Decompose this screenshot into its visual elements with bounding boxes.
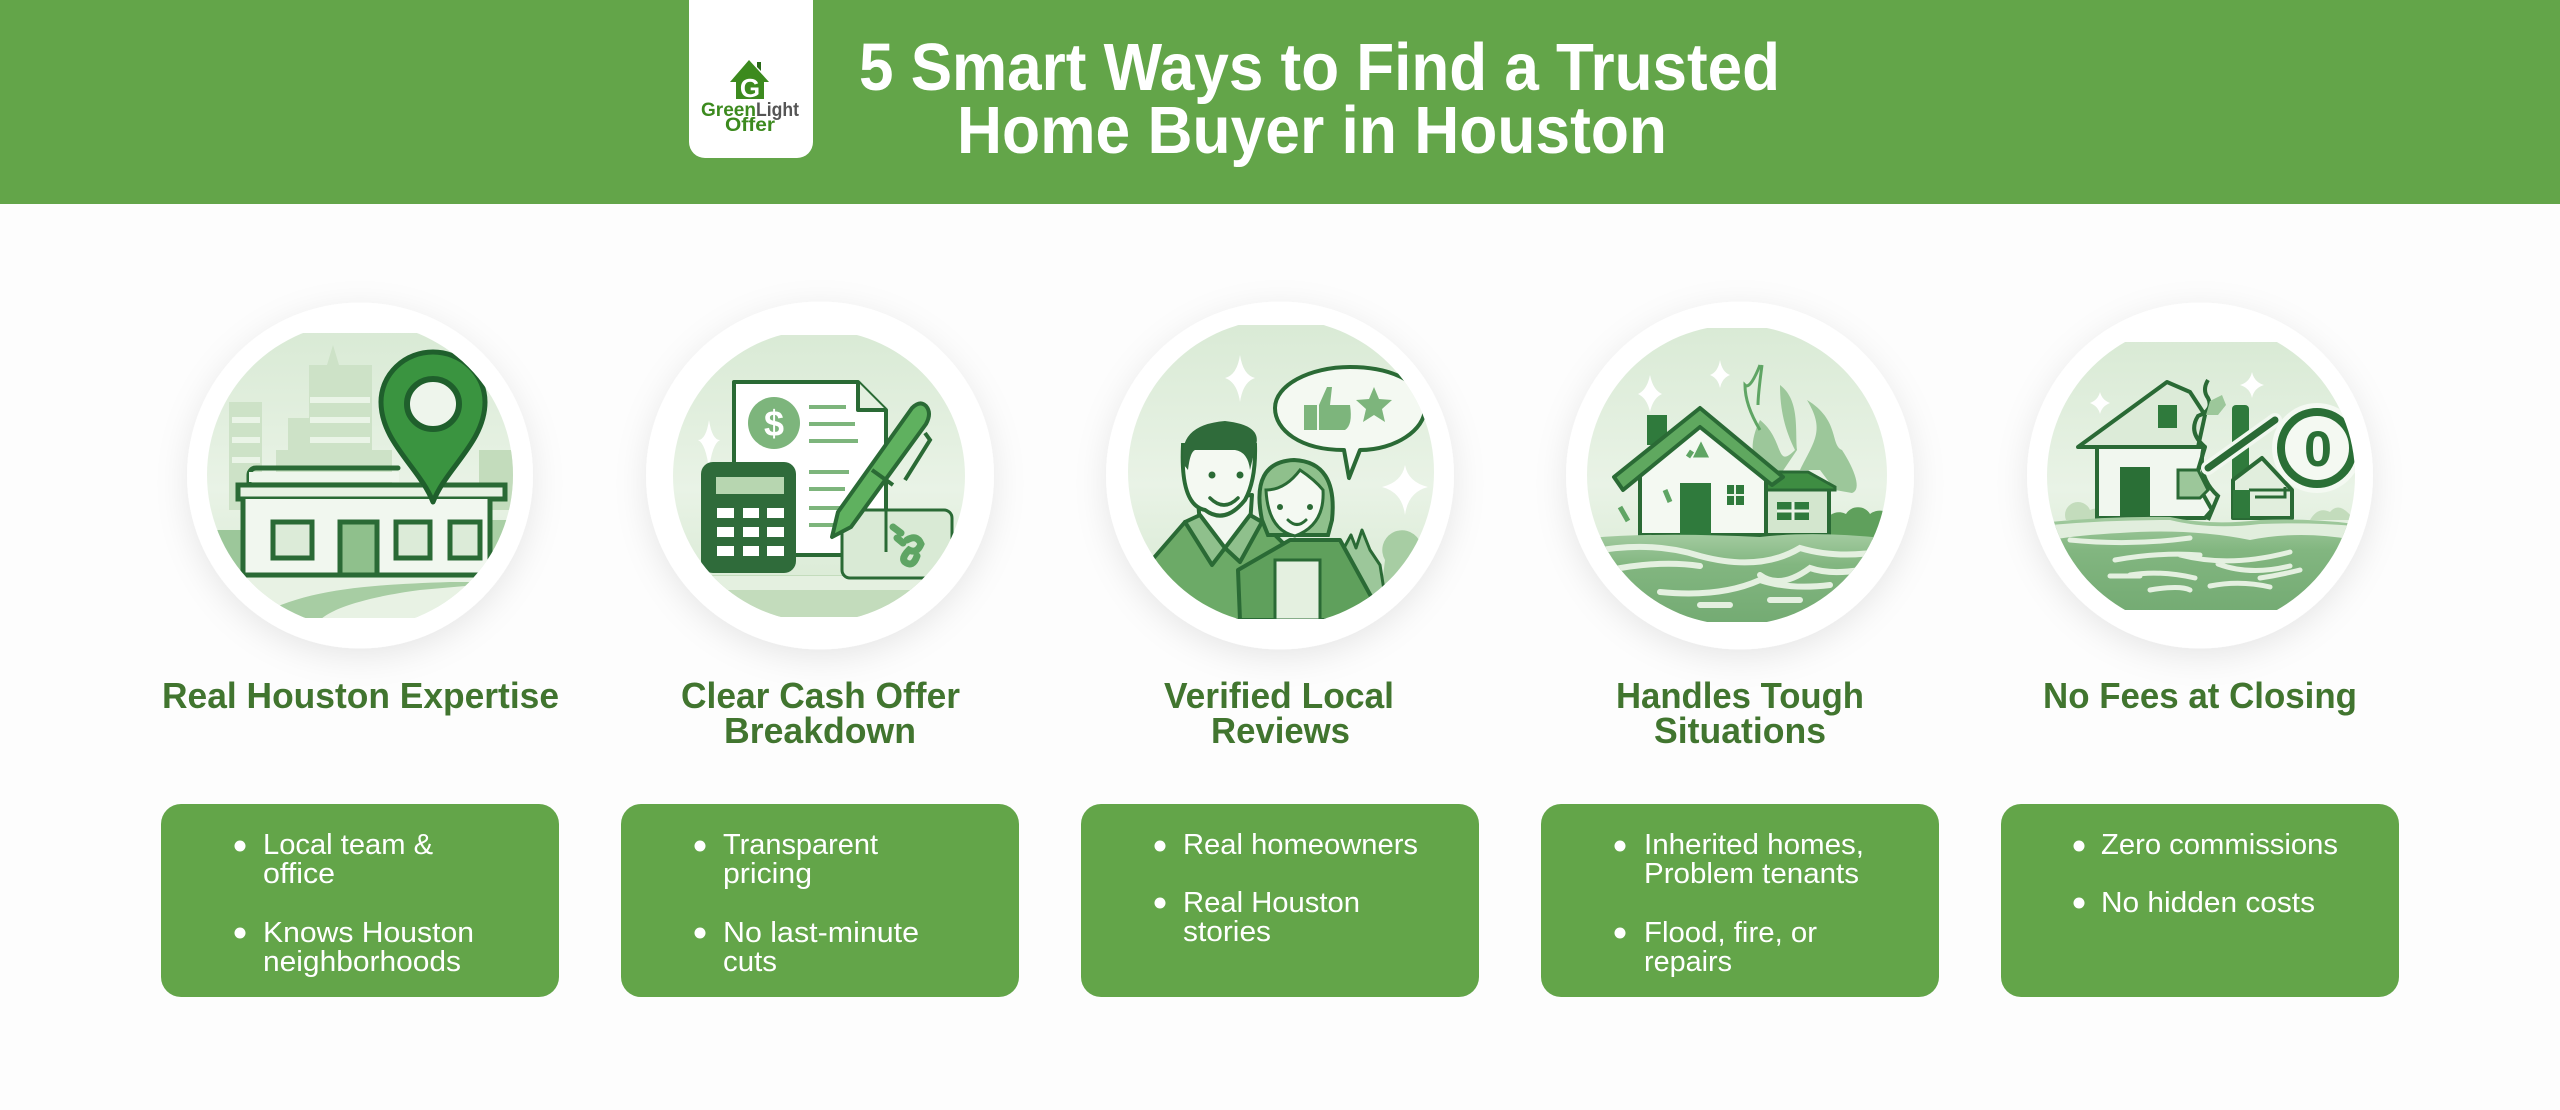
heading: Breakdown: [724, 710, 916, 751]
logo: GreenLight Offer: Light: [756, 100, 800, 121]
bullet card: pricing: [723, 858, 812, 890]
heading: No Fees at Closing: [2043, 675, 2357, 716]
bullet card: stories: [1183, 916, 1271, 948]
bullet card: [2001, 804, 2399, 997]
icon: damaged house with zero fee badge: [2027, 302, 2373, 648]
column 1: Real Houston Expertise: [161, 302, 559, 997]
bullet card: Zero commissions: [2101, 829, 2338, 861]
bullet card: No hidden costs: [2101, 887, 2315, 919]
bullet card: Inherited homes,: [1644, 829, 1864, 861]
bullet card: No last-minute: [723, 917, 919, 949]
title: [859, 30, 1780, 168]
heading: Clear Cash Offer: [681, 675, 960, 716]
bullet card: Knows Houston: [263, 917, 474, 949]
bullet card: office: [263, 858, 335, 890]
title: 5 Smart Ways to Find a Trusted: [859, 30, 1780, 105]
column 2: Clear Cash Offer Breakdown: [621, 302, 1019, 997]
bullet card: Problem tenants: [1644, 858, 1859, 890]
bullet card: [161, 804, 559, 997]
bullet card: [621, 804, 1019, 997]
column 4: Handles Tough Situations: [1541, 302, 1939, 997]
bullet card: repairs: [1644, 946, 1732, 978]
logo: GreenLight Offer: [689, 0, 813, 158]
heading: [681, 675, 960, 751]
logo: GreenLight Offer: Green: [701, 100, 756, 121]
bullet card: [1081, 804, 1479, 997]
bullet card: Real homeowners: [1183, 829, 1418, 861]
bullet card: Local team &: [263, 829, 433, 861]
bullet card: Real Houston: [1183, 887, 1360, 919]
heading: Verified Local: [1164, 675, 1394, 716]
column 3: Verified Local Reviews: [1081, 302, 1479, 997]
icon: damaged house with zero fee badge: 0: [2304, 421, 2332, 477]
bullet card: Transparent: [723, 829, 878, 861]
header banner: [0, 0, 2560, 204]
bullet card: neighborhoods: [263, 946, 461, 978]
bullet card: [1541, 804, 1939, 997]
heading: Real Houston Expertise: [162, 675, 559, 716]
column 5: No Fees at Closing: [2001, 302, 2399, 997]
heading: Reviews: [1211, 710, 1350, 751]
icon: offer sheet, calculator and pen: $: [764, 403, 784, 444]
logo: GreenLight Offer: G: [740, 73, 760, 103]
heading: [1164, 675, 1394, 751]
icon: smiling couple with review bubble: [1106, 302, 1454, 650]
logo: GreenLight Offer: Offer: [725, 115, 776, 136]
heading: Handles Tough: [1616, 675, 1864, 716]
icon: offer sheet, calculator and pen: [646, 302, 994, 650]
icon: house with fire and flood water: [1566, 302, 1914, 650]
bullet card: Flood, fire, or: [1644, 917, 1817, 949]
heading: Situations: [1654, 710, 1826, 751]
icon: map pin over local office: [187, 302, 533, 648]
title: Home Buyer in Houston: [957, 93, 1667, 168]
heading: [1616, 675, 1864, 751]
bullet card: cuts: [723, 946, 777, 978]
